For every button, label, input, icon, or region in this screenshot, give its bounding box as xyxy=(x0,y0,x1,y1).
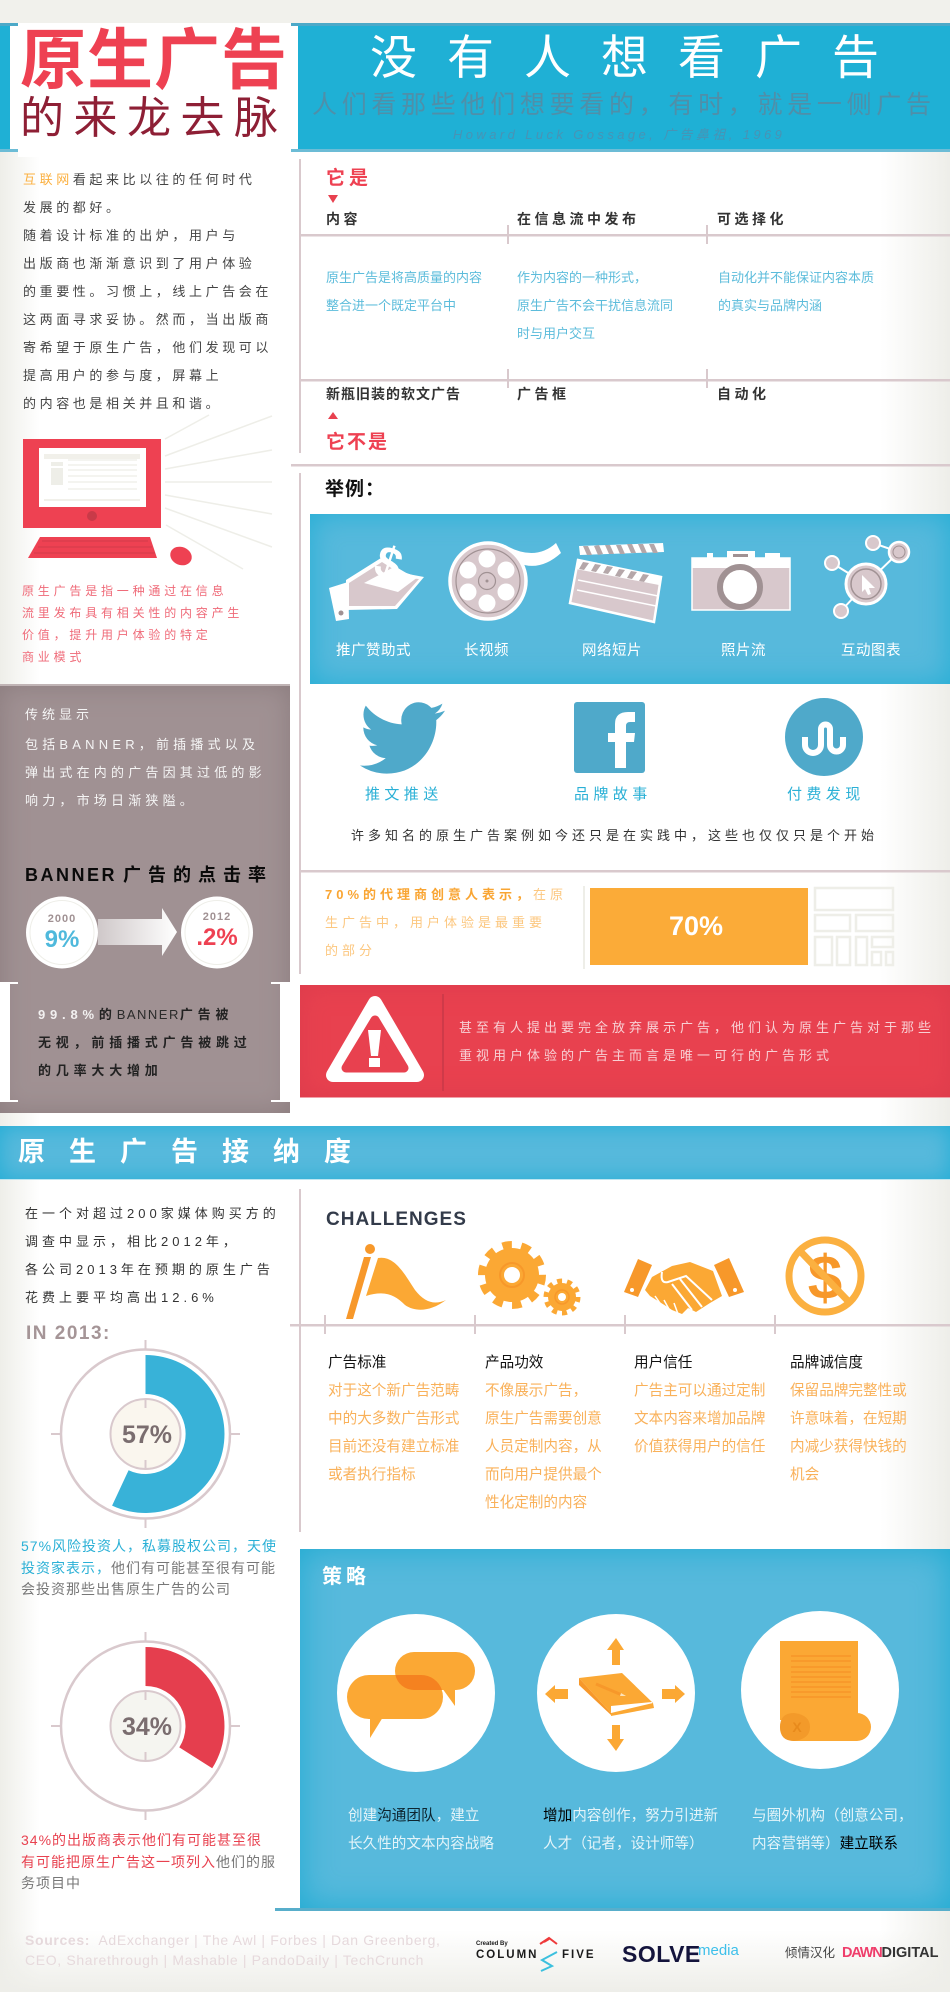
chart: banner click-through arrow and circles xyxy=(26,896,253,968)
strategy text: partners: 内容营销等）建立联系 xyxy=(752,1836,898,1852)
panel: title white box xyxy=(10,26,298,149)
text: 57 percent xyxy=(21,1538,277,1597)
icon: gears xyxy=(482,1245,578,1313)
text: column 3: 自动化并不能保证内容本质 xyxy=(718,270,874,285)
heading: challenges: CHALLENGES xyxy=(326,1209,467,1230)
text: warning: 甚至有人提出要完全放弃展示广告，他们认为原生广告对于那些 xyxy=(459,1020,935,1035)
text: column 2: 时与用户交互 xyxy=(517,326,595,341)
challenge: product efficacy: 人员定制内容，从 xyxy=(485,1439,602,1455)
text: column 1: 整合进一个既定平台中 xyxy=(326,298,456,313)
quote attribution: Howard Luck Gossage, 广告鼻祖, 1969 xyxy=(453,127,785,142)
text: intro paragraph: 随着设计标准的出炉，用户与 xyxy=(23,228,239,243)
strategy text: partners xyxy=(752,1807,913,1852)
chart: 34 percent donut xyxy=(51,1632,240,1820)
chart: 70 percent bar with wireframe xyxy=(583,886,893,969)
logo: dawn digital: DAWNDIGITAL xyxy=(842,1945,938,1961)
text: column 1 xyxy=(326,270,482,313)
icon: hand holding dollar: $ xyxy=(368,534,409,592)
chart: 34 percent donut: 34% xyxy=(122,1713,172,1741)
text: definition xyxy=(22,584,243,664)
icon: twitter bird xyxy=(360,702,445,774)
challenge: brand integrity: 品牌诚信度 xyxy=(790,1355,863,1371)
year: 2000 xyxy=(48,913,76,925)
text: definition: 原生广告是指一种通过在信息 xyxy=(22,584,227,598)
text: traditional display body: 弹出式在内的广告因其过低的影 xyxy=(25,765,266,780)
social labels row xyxy=(365,786,865,803)
text: definition: 价值，提升用户体验的特定 xyxy=(22,628,212,642)
icon: chat bubbles xyxy=(337,1614,495,1772)
logo: column five mark xyxy=(540,1938,557,1971)
chart: 57 percent donut: 57% xyxy=(122,1421,172,1449)
solve: SOLVE xyxy=(622,1941,701,1967)
text: traditional display body: 响力，市场日渐狭隘。 xyxy=(25,793,197,808)
text: intro paragraph: 提高用户的参与度，屏幕上 xyxy=(23,368,222,383)
title: main: 原生广告 xyxy=(20,23,288,97)
title: sub: 的来龙去脉 xyxy=(20,94,288,143)
label: sponsored: 推广赞助式 xyxy=(336,643,411,659)
icon labels row xyxy=(336,642,901,659)
icon: facebook xyxy=(574,702,645,773)
panel: traditional display gray xyxy=(0,684,290,1113)
heading: banner CTR: BANNER 广告的点击率 xyxy=(25,865,273,885)
media: media xyxy=(698,1942,739,1959)
panel: white side cut-outs forming brackets xyxy=(0,982,290,1102)
challenge: brand integrity: 内减少获得快钱的 xyxy=(790,1439,907,1455)
text: definition: 流里发布具有相关性的内容产生 xyxy=(22,606,243,620)
text: 57 percent: 投资家表示，他们有可能甚至很有可能 xyxy=(21,1560,276,1576)
panel: strategy blue xyxy=(300,1549,950,1908)
challenge: product efficacy: 性化定制的内容 xyxy=(485,1495,587,1511)
label: web short: 网络短片 xyxy=(582,643,642,659)
text: intro paragraph: 的内容也是相关并且和谐。 xyxy=(23,396,222,411)
text: 70 percent xyxy=(325,887,567,958)
challenge: user trust: 用户信任 xyxy=(634,1355,692,1371)
text: ignored banners: 99.8%的BANNER广告被 xyxy=(38,1007,233,1022)
text: 34 percent: 务项目中 xyxy=(21,1875,81,1891)
label: long video: 长视频 xyxy=(464,643,509,659)
stat: 70 percent: 70% xyxy=(669,911,723,941)
text: sources xyxy=(25,1932,441,1968)
stat: 2000 xyxy=(45,913,79,953)
text: intro paragraph: 互联网看起来比以往的任何时代 xyxy=(23,172,255,187)
challenge: product efficacy: 原生广告需要创意 xyxy=(485,1411,602,1427)
text: column 1: 原生广告是将高质量的内容 xyxy=(326,270,482,285)
icon: hand holding dollar xyxy=(329,534,424,621)
text: sources: Sources: AdExchanger | The Awl | Forbes | Dan Greenberg, xyxy=(25,1932,441,1948)
challenge: product efficacy: 而向用户提供最个 xyxy=(485,1467,602,1483)
panel: warning red xyxy=(300,985,950,1098)
year: 2012 xyxy=(203,911,231,923)
text: ignored banners: 的几率大大增加 xyxy=(38,1063,163,1078)
text: 70 percent: 70%的代理商创意人表示，在原 xyxy=(325,887,567,902)
text: examples note: 许多知名的原生广告案例如今还只是在实践中，这些也仅仅只是个开始 xyxy=(351,828,878,843)
heading: in 2013: IN 2013: xyxy=(26,1323,111,1344)
challenge: user trust: 广告主可以通过定制 xyxy=(634,1383,765,1399)
icon: flag xyxy=(346,1244,446,1319)
strategy text: content: 人才（记者，设计师等） xyxy=(543,1836,704,1852)
label: ad box: 广告框 xyxy=(517,386,570,402)
text: intro paragraph: 寄希望于原生广告，他们发现可以 xyxy=(23,340,272,355)
challenge: brand integrity: 保留品牌完整性或 xyxy=(790,1383,907,1399)
label: optional: 可选择化 xyxy=(717,211,787,227)
strategy text: content xyxy=(543,1807,718,1852)
heading: it is not: 它不是 xyxy=(326,432,389,453)
strategy text: content: 增加内容创作，努力引进新 xyxy=(543,1808,718,1824)
column: COLUMN xyxy=(476,1949,538,1961)
text: survey xyxy=(25,1206,280,1305)
text: definition: 商业模式 xyxy=(22,650,85,664)
text: 70 percent: 生广告中，用户体验是最重要 xyxy=(325,915,546,930)
text: column 3 xyxy=(718,270,874,313)
challenge: brand integrity: 许意味着，在短期 xyxy=(790,1411,907,1427)
text: survey: 各公司2013年在预期的原生广告 xyxy=(25,1262,274,1277)
icon: interactive network xyxy=(825,536,909,618)
text: 34 percent xyxy=(21,1832,276,1891)
text: survey: 在一个对超过200家媒体购买方的 xyxy=(25,1206,280,1221)
heading: it is: 它是 xyxy=(326,168,372,189)
panel: examples blue xyxy=(310,514,950,684)
challenge: ad standards: 目前还没有建立标准 xyxy=(328,1439,459,1455)
chart: 57 percent donut xyxy=(51,1340,240,1528)
strategy text: communication: 创建沟通团队，建立 xyxy=(348,1808,479,1824)
text: sources: CEO, Sharethrough | Mashable | PandoDaily | TechCrunch xyxy=(25,1952,424,1968)
label: brand stories: 品牌故事 xyxy=(574,786,652,803)
strategy text: communication xyxy=(348,1807,494,1852)
heading: acceptance: 原生广告接纳度 xyxy=(18,1137,375,1167)
created by: Created By xyxy=(476,1941,508,1947)
text: translator credit: 倾情汉化 xyxy=(785,1946,835,1960)
icon: camera xyxy=(692,551,790,610)
heading: nobody wants ads: 没有人想看广告 xyxy=(370,31,909,84)
text: intro paragraph: 出版商也渐渐意识到了用户体验 xyxy=(23,256,255,271)
strategy text: communication: 长久性的文本内容战略 xyxy=(348,1836,494,1852)
heading row: is not xyxy=(326,386,770,402)
text: 70 percent: 的部分 xyxy=(325,943,376,958)
logo: column five xyxy=(476,1940,596,1961)
icon: scroll document: X xyxy=(792,1719,802,1735)
label: interactive chart: 互动图表 xyxy=(841,643,901,659)
heading row: is xyxy=(326,211,787,227)
icon: no dollar: $ xyxy=(808,1244,842,1313)
label: promoted tweets: 推文推送 xyxy=(365,786,443,803)
challenge: user trust xyxy=(634,1354,765,1455)
text: traditional display body xyxy=(25,737,266,808)
panel: section banner xyxy=(0,1126,950,1180)
challenge: brand integrity: 机会 xyxy=(790,1467,819,1483)
logo: solve media xyxy=(622,1941,739,1967)
strategy text: partners: 与圈外机构（创意公司， xyxy=(752,1808,913,1824)
icon: stumbleupon xyxy=(785,698,863,776)
text: column 3: 的真实与品牌内涵 xyxy=(718,298,822,313)
icon: triangle up xyxy=(328,412,338,419)
icon: clapperboard xyxy=(570,543,664,622)
icon: no dollar xyxy=(789,1240,861,1313)
label: content: 内容 xyxy=(326,211,361,227)
challenge: user trust: 文本内容来增加品牌 xyxy=(634,1411,765,1427)
text: intro paragraph: 发展的都好。 xyxy=(23,200,123,215)
text: survey: 花费上要平均高出12.6% xyxy=(25,1290,218,1305)
icon: film reel xyxy=(450,543,561,619)
label: paid discovery: 付费发现 xyxy=(787,786,865,803)
text: 34 percent: 34%的出版商表示他们有可能甚至很 xyxy=(21,1832,262,1848)
heading: traditional display: 传统显示 xyxy=(25,707,93,722)
text: ignored banners xyxy=(38,1007,252,1078)
text: warning xyxy=(459,1020,935,1063)
challenge: product efficacy: 产品功效 xyxy=(485,1355,543,1371)
text: survey: 调查中显示，相比2012年， xyxy=(25,1234,240,1249)
label: advertorial: 新瓶旧装的软文广告 xyxy=(326,386,461,402)
text: traditional display body: 包括BANNER，前插播式以及 xyxy=(25,737,259,752)
icon: triangle down xyxy=(328,195,338,203)
icon: handshake xyxy=(624,1258,744,1314)
text: intro paragraph: 的重要性。习惯上，线上广告会在 xyxy=(23,284,272,299)
value: .2% xyxy=(196,924,238,951)
value: 9% xyxy=(45,926,79,953)
challenge: brand integrity xyxy=(790,1354,907,1483)
challenge: user trust: 价值获得用户的信任 xyxy=(634,1439,765,1455)
challenge: ad standards xyxy=(328,1354,459,1483)
text: 57 percent: 57%风险投资人，私募股权公司，天使 xyxy=(21,1538,277,1554)
text: intro paragraph: 这两面寻求妥协。然而，当出版商 xyxy=(23,312,272,327)
panel: header blue banner xyxy=(0,23,950,152)
icon: warning triangle xyxy=(333,1003,417,1075)
icon: monitor with rays xyxy=(23,415,272,569)
icon: book with arrows xyxy=(537,1614,695,1772)
challenge: product efficacy: 不像展示广告， xyxy=(485,1383,587,1399)
text: 34 percent: 有可能把原生广告这一项列入他们的服 xyxy=(21,1854,276,1870)
five: FIVE xyxy=(562,1949,596,1961)
label: photo stream: 照片流 xyxy=(721,643,766,659)
stat: 2012 xyxy=(196,911,238,951)
icon: scroll document xyxy=(741,1611,899,1769)
heading: strategy: 策略 xyxy=(322,1566,370,1588)
challenge: product efficacy xyxy=(485,1354,602,1511)
text: column 2 xyxy=(517,270,673,341)
text: warning: 重视用户体验的广告主而言是唯一可行的广告形式 xyxy=(459,1048,833,1063)
challenge: ad standards: 对于这个新广告范畴 xyxy=(328,1383,459,1399)
challenge: ad standards: 广告标准 xyxy=(328,1355,386,1371)
challenge: ad standards: 或者执行指标 xyxy=(328,1467,416,1483)
quote: 人们看那些他们想要看的，有时，就是一侧广告 xyxy=(312,91,936,119)
challenge: ad standards: 中的大多数广告形式 xyxy=(328,1411,459,1427)
text: column 2: 原生广告不会干扰信息流同 xyxy=(517,298,673,313)
label: in-stream: 在信息流中发布 xyxy=(517,211,640,227)
text: intro paragraph xyxy=(23,172,272,411)
label: automation: 自动化 xyxy=(717,386,770,402)
text: 57 percent: 会投资那些出售原生广告的公司 xyxy=(21,1581,231,1597)
text: ignored banners: 无视，前插播式广告被跳过 xyxy=(38,1035,252,1050)
text: column 2: 作为内容的一种形式， xyxy=(517,270,647,285)
heading: examples: 举例： xyxy=(325,479,385,500)
